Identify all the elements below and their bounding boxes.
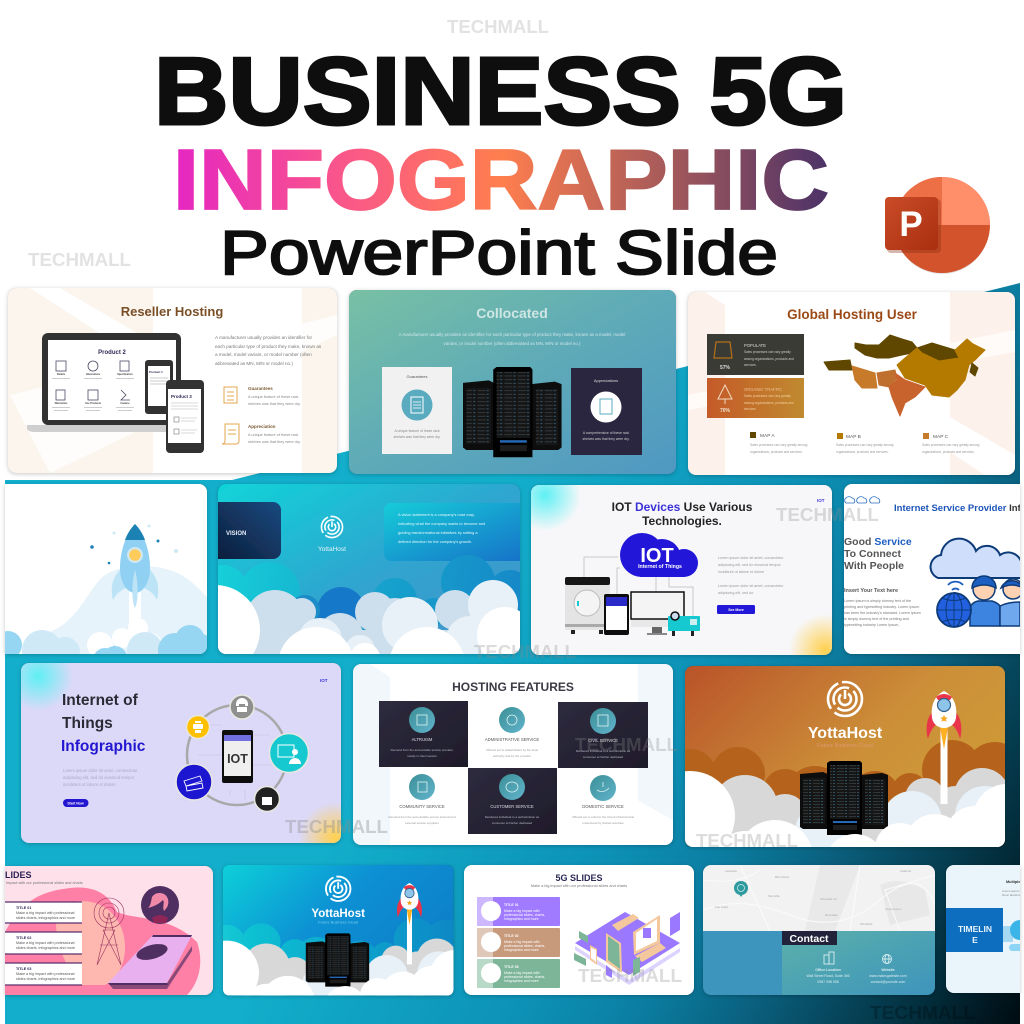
button — [63, 799, 88, 807]
laptop mockup: Product 2 — [98, 350, 126, 356]
title rows: infographics and more — [504, 917, 539, 921]
website details: Website — [881, 968, 895, 972]
stat card: Populate 57%: 57% — [720, 365, 731, 371]
legend: organizations, products and services. — [750, 450, 803, 454]
button — [717, 605, 755, 614]
slide heading: Technologies. — [642, 514, 722, 528]
stat card: Organic Traffic 70%: Sales processes can vary greatly — [744, 394, 791, 398]
watermarks: TECHMALL — [28, 250, 131, 270]
body copy: incididunt ut labore et dolore — [63, 782, 116, 787]
panel: Vision slide — [216, 483, 522, 657]
card: Guarantees — [382, 367, 452, 454]
body copy: each particular type of product they make, known as — [215, 344, 322, 349]
slide heading — [61, 692, 146, 755]
timeline label: E — [972, 935, 978, 945]
body copy — [844, 588, 921, 627]
slide heading: Global Hosting User — [787, 307, 918, 322]
title rows: TITLE 02 — [16, 936, 31, 940]
feature labels: CUSTOMER SERVICE — [490, 804, 534, 809]
body copy: incididunt ut labore et dolore — [718, 570, 764, 574]
street map: Oakland — [900, 869, 912, 873]
panel: rocket launch slide — [3, 483, 209, 657]
stat card: Populate 57% — [707, 334, 804, 375]
tagline: Future Business Cloud — [318, 919, 358, 924]
body copy: adipiscing elit, sed do — [718, 591, 753, 595]
slide heading: Things — [62, 715, 113, 732]
watermarks: TECHMALL — [870, 1003, 975, 1023]
IOT ring diagram — [176, 695, 308, 812]
clouds — [218, 555, 520, 654]
slide heading — [612, 500, 753, 528]
legend: MAP B — [846, 434, 861, 440]
title rows: professional slides, charts, — [504, 913, 545, 917]
stat card: Organic Traffic 70%: 70% — [720, 408, 731, 414]
card: Appreciations: Appreciations — [594, 378, 618, 383]
tagline: To Connect — [844, 548, 901, 560]
feature descriptions: Demand from the accountable service provider, — [391, 748, 454, 752]
title rows: slides charts, infographics and more — [16, 916, 75, 920]
feature icons — [409, 707, 616, 801]
legend: Sales processes can vary greatly among — [922, 443, 980, 447]
brand name: YottaHost — [808, 725, 883, 742]
title rows: professional slides, charts, — [504, 944, 545, 948]
card: Guarantees: Guarantees — [407, 374, 427, 379]
body copy: Lorem ipsum dolor sit amet, consectetur — [63, 768, 138, 773]
feature labels: ADMINISTRATIVE SERVICE — [485, 737, 539, 742]
logo — [828, 682, 862, 716]
body copy: has been the industry's standard. Lorem Ipsum — [844, 611, 921, 615]
slide heading: LIDES — [5, 870, 32, 880]
tagline — [844, 536, 912, 572]
feature text: Appreciation — [248, 424, 301, 444]
title rows — [477, 897, 560, 988]
title rows: infographics and more — [504, 948, 539, 952]
stat card: Populate 57%: Sales processes can vary greatly — [744, 350, 791, 354]
timeline node — [1010, 920, 1024, 940]
feature text: Appreciation: shelves was that they were dry. — [248, 440, 301, 444]
pill tag — [1009, 944, 1024, 951]
laptop mockup: Use Products — [85, 402, 102, 405]
icon: office — [824, 952, 834, 964]
tagline: Future Business Cloud — [817, 743, 873, 749]
feature descriptions: Rendered individual to a authorization as — [485, 815, 540, 819]
stat card: Populate 57%: among organizations, products and — [744, 357, 794, 361]
icon: people, cloud and globe — [931, 539, 1023, 627]
laptop mockup: Feature — [120, 402, 130, 405]
feature descriptions: consumer at his/her dedicated — [583, 755, 623, 759]
isometric devices illustration — [574, 912, 680, 985]
sub heading: Impact with our professional slides and charts — [6, 881, 83, 885]
IOT cloud: Internet of Things — [638, 564, 682, 570]
feature labels: COMMUNITY SERVICE — [399, 804, 445, 809]
body copy: a model, model variant, or model number (often — [215, 352, 312, 357]
vision tab — [218, 502, 281, 559]
stat card: Organic Traffic 70% — [707, 378, 804, 418]
timeline label: TIMELIN — [958, 924, 992, 934]
laptop mockup — [27, 333, 181, 432]
tablet mockup: Product 1: Product 1 — [149, 370, 163, 374]
small copy: Lorem ipsum — [1002, 889, 1020, 893]
watermarks: TECHMALL — [578, 966, 682, 986]
feature text: Guarantees: A unique feature of these rack — [248, 395, 299, 399]
watermarks: TECHMALL — [447, 17, 549, 37]
vision statement — [384, 503, 529, 561]
rocket — [90, 524, 178, 640]
body copy: Lorem ipsum dolor sit amet, consectetur — [718, 556, 784, 560]
map pin — [734, 881, 748, 897]
legend: MAP A — [760, 433, 775, 439]
legend: Sales processes can vary greatly among — [836, 443, 894, 447]
body copy: abbreviated as MN, M/N or model no.) — [215, 361, 293, 366]
body copy: adipiscing elit, sed do eiusmod tempor — [718, 563, 781, 567]
panel: 5G Slides slide — [464, 865, 694, 995]
vision statement: guiding transformational initiatives by setting a — [398, 530, 478, 535]
feature descriptions: Rendered individual to a authorization as — [576, 749, 631, 753]
panel: Internet of Things Infographic slide — [3, 641, 371, 874]
title rows: TITLE 01 — [504, 903, 519, 907]
card: Appreciations: A comprehensive of these rack — [583, 431, 629, 435]
intro copy: variant, or model number (often abbreviated as MN, M/N or model no.) — [444, 341, 581, 346]
card: Guarantees: A unique feature of these rack — [394, 429, 440, 433]
body copy: is simply dummy text of the printing and — [844, 617, 909, 621]
feature labels: ALTRUISM — [412, 737, 433, 742]
feature descriptions: Offered set to stakeholders by the local — [486, 748, 538, 752]
street map: Fair Oaks — [715, 905, 729, 909]
background: teal diagonal panel — [5, 283, 1020, 1024]
radio tower — [94, 898, 124, 965]
IOT cloud: IOT — [640, 545, 674, 567]
feature cards dark — [379, 701, 648, 834]
title rows: Make a big impact with professional — [16, 911, 75, 915]
phone mockup: Product 3: Product 3 — [171, 394, 192, 399]
title: BUSINESS 5G — [154, 38, 847, 145]
small copy — [1002, 880, 1022, 897]
title rows: Make a big impact with — [504, 909, 540, 913]
body copy: Lorem ipsum dolor sit amet, consectetur — [718, 584, 784, 588]
slide heading: 5G SLIDES — [555, 873, 603, 883]
feature labels — [399, 737, 624, 809]
feature descriptions — [388, 748, 634, 825]
subtitle: gradient word: INFOGRAPHIC — [173, 133, 829, 228]
feature descriptions: external service suppliers — [405, 821, 439, 825]
title rows: Make a big impact with — [504, 971, 540, 975]
panel: Contact slide — [703, 865, 935, 995]
contact label: Contact — [789, 933, 829, 945]
body copy: printing and typesetting industry. Lorem Ipsum — [844, 605, 919, 609]
title rows: slides charts, infographics and more — [16, 946, 75, 950]
avatar — [141, 886, 179, 924]
street map: Greenhaven — [885, 907, 902, 911]
timeline label — [946, 908, 1003, 952]
body copy: Lorem Ipsum is simply dummy text of the — [844, 599, 911, 603]
body copy — [215, 335, 322, 366]
title rows: TITLE 01 — [16, 906, 31, 910]
panel: YottaHost orange slide — [645, 666, 1024, 896]
server racks — [463, 367, 562, 457]
slide heading: Infographic — [61, 738, 146, 755]
laptop mockup: Warranties — [55, 402, 68, 405]
button: See More — [728, 608, 744, 612]
legend: organizations, products and services. — [922, 450, 975, 454]
icon: appreciation scroll — [222, 424, 239, 444]
logo — [318, 516, 346, 553]
feature text: Guarantees — [248, 386, 301, 406]
feature labels: CIVIL SERVICE — [588, 738, 618, 743]
IOT cloud — [620, 533, 698, 577]
title rows: slides charts, infographics and more — [16, 977, 75, 981]
street map: Bloomfield — [775, 875, 789, 879]
street map: Westfield — [860, 922, 873, 926]
title rows: infographics and more — [504, 979, 539, 983]
feature text: Guarantees: Guarantees — [248, 386, 273, 391]
website details: contact@yoursite.com — [871, 980, 905, 984]
tablet with dish — [108, 935, 192, 989]
body copy — [718, 556, 784, 595]
vision statement: defined direction for the company's growth. — [398, 539, 472, 544]
feature descriptions: Offered set to enforce the Cloud infrastructural — [572, 815, 634, 819]
laptop mockup: Specification — [117, 373, 133, 376]
icon: globe — [882, 954, 892, 964]
street map — [703, 865, 935, 931]
body copy: A manufacturer usually provides an identifier for — [215, 335, 312, 340]
website details: www.mainsgatesite.com — [869, 974, 907, 978]
icons on nodes — [184, 698, 301, 805]
corner tag: IOT — [817, 498, 825, 503]
body copy — [63, 768, 138, 787]
subtitle: PowerPoint Slide: PowerPoint Slide — [220, 219, 778, 288]
watermarks: TECHMALL — [474, 642, 576, 662]
feature descriptions: Demand from the accountable service internal and — [388, 815, 456, 819]
slide heading: Reseller Hosting — [121, 304, 223, 319]
icon: PowerPoint logo — [885, 177, 990, 274]
stat card: Populate 57%: services. — [744, 363, 757, 367]
title rows: Make a big impact with — [504, 940, 540, 944]
title rows: TITLE 02 — [504, 934, 519, 938]
contact label — [782, 931, 837, 945]
slide heading: Collocated — [476, 305, 548, 321]
stat card: Organic Traffic 70%: ORGANIC TRAFFIC — [744, 387, 782, 392]
washing machine — [565, 577, 610, 634]
brand name: YottaHost — [311, 908, 365, 920]
vision statement: indicating what the company wants to become and — [398, 521, 485, 526]
body copy: adipiscing elit, sed do eiusmod tempor — [63, 775, 135, 780]
intro copy: A manufacturer usually provides an identifier for each particular type of product they make, known as a model, model — [399, 332, 625, 337]
title rows: professional slides, charts, — [504, 975, 545, 979]
tagline: With People — [844, 560, 904, 572]
panel: YottaHost blue slide — [194, 865, 479, 1024]
legend: Sales processes can vary greatly among — [750, 443, 808, 447]
intro copy — [399, 332, 625, 346]
monitor — [631, 592, 684, 635]
slide heading: IOT Devices Use Various — [612, 500, 753, 514]
map of Asia — [824, 335, 985, 416]
stat card: Organic Traffic 70%: services. — [744, 407, 757, 411]
stat card: Populate 57%: POPULATE — [744, 343, 766, 348]
connector — [1003, 926, 1013, 942]
vision tab: VISION — [226, 531, 246, 537]
feature descriptions: understood by shared activities — [582, 821, 624, 825]
stat card: Organic Traffic 70%: among organizations, products and — [744, 401, 794, 405]
title rows: TITLE 03 — [16, 967, 31, 971]
watermarks: TECHMALL — [776, 505, 879, 525]
watermarks: TECHMALL — [696, 831, 798, 851]
logo: YottaHost — [318, 546, 346, 553]
small copy: Multiple — [1006, 880, 1020, 884]
legend — [750, 432, 980, 454]
panel: Internet Service Provider slide — [844, 484, 1024, 654]
office details: Wall Street Road, Suite 456 — [806, 974, 850, 978]
small copy: Nunc faucibus — [1002, 893, 1022, 897]
body copy: typesetting industry Lorem Ipsum, — [844, 623, 899, 627]
tablet mockup: Product 1 — [145, 360, 173, 414]
IOT ring diagram: IOT — [227, 752, 248, 766]
smartphone — [604, 594, 629, 635]
office details: Office Location — [815, 968, 841, 972]
panel: Global Hosting User slide — [688, 292, 1015, 475]
office details — [806, 968, 850, 984]
panel: Reseller Hosting slide — [8, 288, 337, 473]
panel: Timeline slide — [946, 865, 1024, 993]
watermarks: TECHMALL — [285, 817, 388, 837]
street map: Lakeside — [725, 869, 737, 873]
sub heading: Make a big impact with our professional slides and charts — [531, 884, 627, 888]
feature text: Appreciation: A unique feature of these rack — [248, 433, 299, 437]
tagline: Good Service — [844, 536, 912, 548]
office details: 0987 098 098 — [817, 980, 839, 984]
title rows: Make a big impact with professional — [16, 941, 75, 945]
vision statement: A vision statement is a company's road map, — [398, 512, 475, 517]
laptop mockup: Alternatives — [86, 373, 101, 376]
panel: Collocated slide — [349, 290, 676, 474]
street map: Financial Ctr. — [820, 897, 838, 901]
card: Appreciations — [571, 368, 642, 455]
icon: guarantees clipboard — [224, 387, 237, 403]
legend: organizations, products and services. — [836, 450, 889, 454]
feature descriptions: consumer at his/her dedicated — [492, 821, 532, 825]
title rows: TITLE 03 — [504, 965, 519, 969]
street map: Montville — [768, 894, 780, 898]
feature text: Guarantees: shelves was that they were dry. — [248, 402, 301, 406]
legend: MAP C — [933, 434, 949, 440]
panel: IOT Devices slide — [529, 484, 834, 658]
watermarks: TECHMALL — [575, 735, 678, 755]
icon row: clouds — [845, 497, 880, 503]
feature text: Appreciation: Appreciation — [248, 424, 276, 429]
slide heading: HOSTING FEATURES — [452, 680, 574, 694]
panel: Hosting Features slide — [353, 664, 673, 845]
feature labels: DOMESTIC SERVICE — [582, 804, 624, 809]
card: Appreciations: shelves was that they were dry. — [582, 437, 630, 441]
logo — [326, 877, 350, 901]
street map: Riverdale — [825, 913, 838, 917]
website details — [869, 968, 907, 984]
laptop mockup: Details — [57, 373, 66, 376]
panel: 5G pink slide — [5, 866, 213, 995]
corner tag: IOT — [320, 678, 328, 683]
icon: PowerPoint logo: P — [899, 205, 923, 244]
phone mockup: Product 3 — [166, 380, 204, 453]
title rows: Make a big impact with professional — [16, 972, 75, 976]
card: Guarantees: shelves was that they were dry. — [393, 435, 441, 439]
feature descriptions: mostly in client section — [407, 754, 437, 758]
body copy: Insert Your Text here — [844, 588, 898, 594]
connector lines — [584, 557, 693, 616]
button: Start Now — [67, 802, 84, 806]
title rows — [5, 902, 82, 985]
clouds — [5, 618, 207, 654]
projector — [668, 612, 700, 636]
slide heading: Internet of — [62, 692, 139, 709]
feature descriptions: authority and by the provider — [493, 754, 531, 758]
